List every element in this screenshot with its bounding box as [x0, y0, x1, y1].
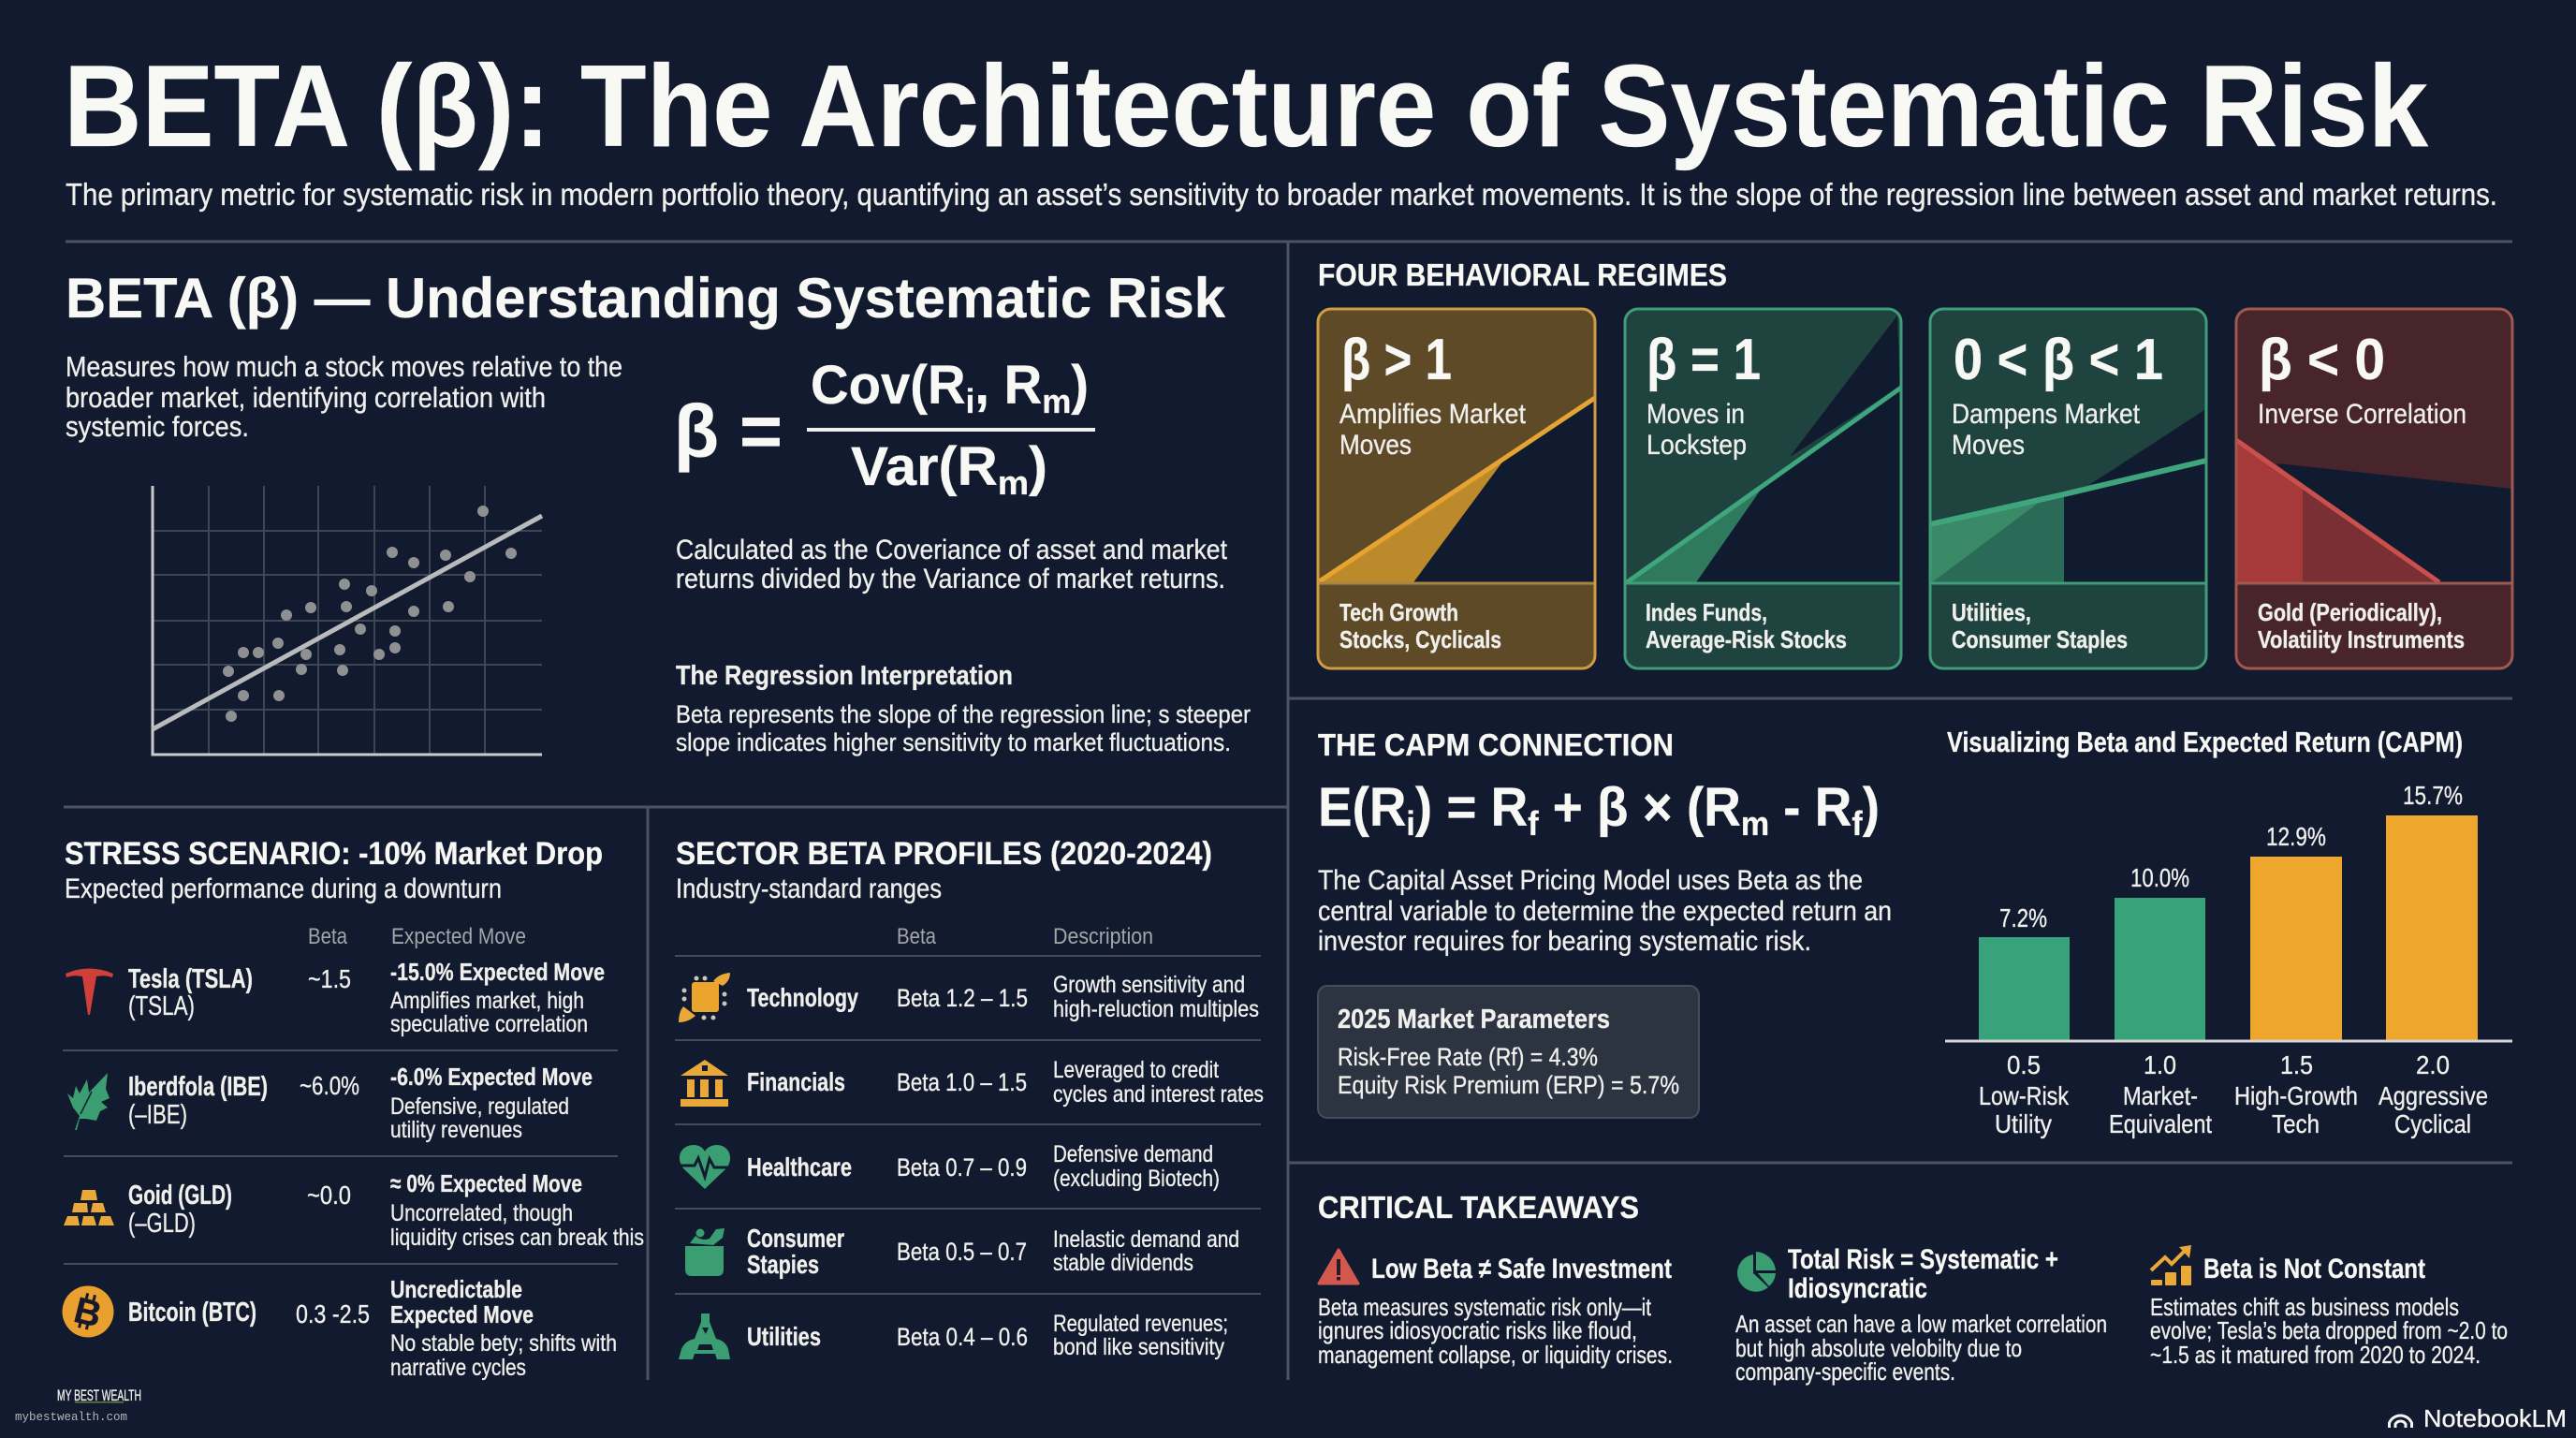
card: beta equals 1: β = 1: [1647, 328, 1761, 392]
card: beta equals 1: Lockstep: [1647, 430, 1747, 461]
formula: CAPM: f: [1528, 804, 1539, 843]
row: Financials: Financials: [747, 1067, 845, 1096]
bar chart: beta and expected return: 1.5: [2280, 1050, 2313, 1079]
takeaway: total risk: Total Risk = Systematic +: [1788, 1244, 2058, 1275]
row: Iberdrola: Iberdfola (IBE): [128, 1072, 268, 1102]
icon: gold bars: [64, 1190, 114, 1225]
title: BETA (β): The Architecture of Systematic Risk: [64, 42, 2429, 171]
row: Utilities: Beta 0.4 – 0.6: [897, 1323, 1028, 1351]
bar chart: beta and expected return: 2.0: [2416, 1050, 2450, 1079]
row: Gold: Uncorrelated, though: [390, 1200, 573, 1226]
heading: THE CAPM CONNECTION: [1318, 727, 1674, 762]
subheading: Industry-standard ranges: [676, 873, 942, 904]
card: beta between 0 and 1: Moves: [1952, 430, 2025, 461]
bar chart: beta and expected return: Market-: [2123, 1081, 2198, 1110]
card: beta less than 0: Gold (Periodically),: [2258, 598, 2442, 626]
bar chart: beta and expected return: High-Growth: [2234, 1081, 2358, 1110]
description: central variable to determine the expected return an: [1318, 896, 1892, 927]
row: Healthcare: (excluding Biotech): [1053, 1166, 1220, 1192]
bar chart: beta and expected return: 0.5: [2007, 1050, 2041, 1079]
icon: warning triangle: [1319, 1250, 1358, 1284]
logo: NotebookLM: NotebookLM: [2423, 1404, 2567, 1432]
row: Gold: ~0.0: [307, 1181, 351, 1210]
formula: beta: =: [739, 389, 783, 473]
card: beta equals 1: Average-Risk Stocks: [1646, 625, 1847, 653]
card: beta between 0 and 1: Utilities,: [1952, 598, 2031, 626]
bar chart: beta and expected return: Aggressive: [2378, 1081, 2488, 1110]
formula: beta: β: [674, 389, 719, 473]
description: Measures how much a stock moves relative to the: [66, 350, 622, 383]
row: Tesla: -15.0% Expected Move: [390, 958, 605, 986]
row: Bitcoin: No stable bety; shifts with: [390, 1330, 617, 1357]
formula: beta: , R: [974, 355, 1042, 416]
row: Gold: liquidity crises can break this: [390, 1225, 644, 1251]
heading: STRESS SCENARIO: -10% Market Drop: [65, 836, 603, 872]
takeaway: total risk: but high absolute velobilty due to: [1735, 1334, 2022, 1362]
row: Iberdrola: utility revenues: [390, 1117, 522, 1143]
card: beta between 0 and 1: Consumer Staples: [1952, 625, 2128, 653]
row: Technology: Beta 1.2 – 1.5: [897, 984, 1028, 1012]
row: Gold: (–GLD): [128, 1209, 196, 1239]
row: Consumer Staples: Stapies: [747, 1250, 819, 1279]
subheading: Expected performance during a downturn: [65, 873, 502, 904]
icon: utility tower: [679, 1313, 730, 1359]
row: Bitcoin: Bitcoin (BTC): [128, 1298, 256, 1328]
row: Healthcare: Defensive demand: [1053, 1141, 1213, 1167]
panel: understanding systematic risk: [66, 267, 1251, 756]
row: Gold: Goid (GLD): [128, 1181, 232, 1211]
formula: beta: m: [998, 463, 1029, 502]
heading: CRITICAL TAKEAWAYS: [1318, 1190, 1639, 1225]
row: Iberdrola: [67, 1063, 593, 1143]
formula explanation: [676, 535, 1228, 594]
description: [1318, 865, 1892, 957]
row: Bitcoin: 0.3 -2.5: [296, 1299, 370, 1328]
takeaway: beta not constant: ~1.5 as it matured from 2020 to 2024.: [2150, 1341, 2481, 1369]
row: Healthcare: Beta 0.7 – 0.9: [897, 1153, 1027, 1181]
bar chart: beta and expected return: Utility: [1995, 1109, 2052, 1138]
bar chart: beta and expected return: 7.2%: [1999, 903, 2047, 932]
logo: My Best Wealth: MY BEST WEALTH: [57, 1387, 141, 1404]
chart: regression scatter plot: [153, 486, 542, 755]
logo: My Best Wealth: [15, 1387, 141, 1424]
card: beta equals 1: [1625, 309, 1901, 668]
formula: beta: ): [1029, 436, 1047, 497]
callout: 2025 market parameters: Risk-Free Rate (Rf) = 4.3%: [1338, 1043, 1598, 1071]
formula: CAPM: i: [1406, 804, 1415, 843]
row: Bitcoin: Expected Move: [390, 1300, 534, 1328]
panel: stress scenario: [62, 836, 644, 1381]
bar chart: beta and expected return: Tech: [2272, 1109, 2320, 1138]
takeaway: low beta: Beta measures systematic risk only—it: [1318, 1293, 1652, 1321]
table header: Expected Move: [391, 924, 526, 949]
table header: Beta: [308, 924, 348, 949]
row: Tesla: [66, 958, 605, 1037]
row: Utilities: Utilities: [747, 1322, 821, 1351]
icon: bank: [681, 1060, 728, 1107]
formula: beta: i: [966, 382, 974, 420]
formula: CAPM: E(R: [1318, 777, 1412, 838]
takeaway: low beta: ignures idiosyocratic risks like floud,: [1318, 1316, 1637, 1344]
formula explanation: Calculated as the Coveriance of asset and market: [676, 535, 1228, 565]
bar chart: beta and expected return: 10.0%: [2130, 863, 2189, 892]
row: Financials: [681, 1057, 1264, 1108]
takeaway: low beta: Low Beta ≠ Safe Investment: [1371, 1254, 1672, 1284]
heading: BETA (β) — Understanding Systematic Risk: [66, 267, 1226, 330]
row: Consumer Staples: Beta 0.5 – 0.7: [897, 1238, 1027, 1266]
takeaway: beta not constant: [2150, 1245, 2508, 1369]
description: The Capital Asset Pricing Model uses Beta as the: [1318, 865, 1863, 896]
bar chart: beta and expected return: Low-Risk: [1979, 1081, 2070, 1110]
icon: bitcoin: B: [70, 1290, 106, 1336]
row: Bitcoin: Uncredictable: [390, 1275, 522, 1303]
regression interpretation: The Regression Interpretation: [676, 661, 1013, 691]
formula: beta: Cov(R: [811, 355, 971, 416]
callout: 2025 market parameters: 2025 Market Parameters: [1338, 1005, 1610, 1034]
card: beta between 0 and 1: Dampens Market: [1952, 399, 2141, 430]
table header: [897, 924, 1153, 949]
row: Consumer Staples: Inelastic demand and: [1053, 1226, 1239, 1253]
row: Technology: Growth sensitivity and: [1053, 972, 1245, 998]
takeaway: total risk: An asset can have a low market correlation: [1735, 1310, 2107, 1338]
row: Tesla: (TSLA): [128, 991, 195, 1021]
panel: sector beta profiles: [675, 836, 1264, 1360]
card: beta greater than 1: Tech Growth: [1339, 598, 1458, 626]
card: beta greater than 1: β > 1: [1341, 328, 1452, 392]
formula: CAPM: + β × (R: [1539, 777, 1741, 838]
panel: critical takeaways: [1318, 1190, 2508, 1386]
row: Healthcare: Healthcare: [747, 1152, 852, 1181]
formula: CAPM: ) = R: [1415, 777, 1528, 838]
regression interpretation: Beta represents the slope of the regression line; s steeper: [676, 700, 1251, 728]
regression interpretation: [676, 661, 1251, 756]
bar chart: beta and expected return: 1.0: [2144, 1050, 2176, 1079]
heading: FOUR BEHAVIORAL REGIMES: [1318, 257, 1727, 292]
card: beta less than 0: Inverse Correlation: [2258, 399, 2466, 430]
row: Tesla: Amplifies market, high: [390, 988, 584, 1014]
card: beta equals 1: Indes Funds,: [1646, 598, 1767, 626]
row: Bitcoin: narrative cycles: [390, 1355, 526, 1381]
row: Iberdrola: Defensive, regulated: [390, 1093, 569, 1120]
chart title: Visualizing Beta and Expected Return (CAPM): [1947, 726, 2463, 758]
row: Consumer Staples: [685, 1224, 1239, 1279]
takeaway: beta not constant: Beta is Not Constant: [2203, 1254, 2425, 1284]
table header: Description: [1053, 924, 1153, 949]
formula: CAPM: f: [1852, 804, 1864, 843]
icon: consumer staples: [685, 1228, 724, 1276]
icon: leaf: [67, 1073, 110, 1130]
icon: Tesla logo: [66, 968, 113, 1015]
icon: heart: [680, 1145, 730, 1189]
formula: beta: m: [1042, 382, 1071, 420]
row: Technology: Technology: [747, 983, 858, 1012]
row: Utilities: [679, 1311, 1228, 1360]
table header: [308, 924, 526, 949]
row: Iberdrola: -6.0% Expected Move: [390, 1063, 593, 1091]
card: beta greater than 1: Amplifies Market: [1339, 399, 1527, 430]
takeaway: low beta: management collapse, or liquidity crises.: [1318, 1341, 1673, 1369]
bar chart: beta and expected return: 15.7%: [2403, 781, 2463, 810]
card: beta greater than 1: Moves: [1339, 430, 1412, 461]
bar chart: beta and expected return: Equivalent: [2109, 1109, 2212, 1138]
description: systemic forces.: [66, 410, 249, 443]
icon: NotebookLM arcs: [2389, 1416, 2411, 1428]
bar chart: beta and expected return: Cyclical: [2394, 1109, 2471, 1138]
card: beta between 0 and 1: 0 < β < 1: [1954, 328, 2163, 392]
row: Iberdrola: (–IBE): [128, 1100, 187, 1130]
row: Gold: ≈ 0% Expected Move: [390, 1169, 582, 1197]
formula: beta: ): [1071, 355, 1089, 416]
row: Financials: cycles and interest rates: [1053, 1081, 1264, 1108]
description: investor requires for bearing systematic risk.: [1318, 926, 1811, 957]
formula: beta: [674, 355, 1095, 502]
card: beta between 0 and 1: [1930, 309, 2206, 668]
card: beta equals 1: Moves in: [1647, 399, 1745, 430]
heading: SECTOR BETA PROFILES (2020-2024): [676, 836, 1212, 872]
row: Gold: [64, 1169, 644, 1251]
icon: bitcoin: [62, 1286, 114, 1337]
row: Technology: [679, 972, 1259, 1022]
formula: beta: Var(R: [851, 436, 993, 497]
row: Utilities: Regulated revenues;: [1053, 1311, 1228, 1337]
takeaway: beta not constant: Estimates chift as business models: [2150, 1293, 2459, 1321]
callout: 2025 market parameters: [1318, 986, 1699, 1118]
card: beta less than 0: [2236, 309, 2512, 668]
formula: CAPM: - R: [1769, 777, 1852, 838]
card: beta less than 0: β < 0: [2259, 328, 2385, 392]
row: Financials: Leveraged to credit: [1053, 1057, 1219, 1083]
bar chart: beta and expected return: 12.9%: [2266, 822, 2326, 851]
formula explanation: returns divided by the Variance of market returns.: [676, 564, 1225, 594]
row: Financials: Beta 1.0 – 1.5: [897, 1068, 1027, 1096]
bar chart: beta and expected return: [1945, 726, 2512, 1138]
icon: rising chart: [2151, 1245, 2191, 1285]
row: Consumer Staples: Consumer: [747, 1224, 844, 1253]
card: beta greater than 1: Stocks, Cyclicals: [1339, 625, 1501, 653]
card: beta greater than 1: [1318, 309, 1595, 668]
icon: pie chart: [1737, 1252, 1776, 1292]
takeaway: total risk: Idiosyncratic: [1788, 1273, 1927, 1304]
regression interpretation: slope indicates higher sensitivity to market fluctuations.: [676, 728, 1231, 756]
takeaway: total risk: [1735, 1244, 2107, 1386]
row: Utilities: bond like sensitivity: [1053, 1334, 1224, 1360]
row: Tesla: Tesla (TSLA): [128, 964, 253, 994]
panel: four behavioral regimes: [1318, 257, 2512, 668]
icon: chip: [679, 973, 730, 1022]
row: Bitcoin: [62, 1275, 617, 1381]
row: Iberdrola: ~6.0%: [300, 1071, 359, 1100]
formula: CAPM: m: [1741, 804, 1769, 843]
table header: Beta: [897, 924, 937, 949]
takeaway: low beta: [1318, 1250, 1673, 1369]
formula: CAPM: ): [1863, 777, 1880, 838]
row: Tesla: ~1.5: [308, 964, 351, 993]
takeaway: total risk: company-specific events.: [1735, 1357, 1955, 1386]
row: Healthcare: [680, 1141, 1220, 1192]
panel: CAPM connection: [1318, 726, 2512, 1138]
logo: My Best Wealth: mybestwealth.com: [15, 1411, 127, 1424]
description: broader market, identifying correlation with: [66, 381, 546, 414]
row: Tesla: speculative correlation: [390, 1011, 588, 1037]
row: Technology: high-reluction multiples: [1053, 996, 1259, 1022]
callout: 2025 market parameters: Equity Risk Premium (ERP) = 5.7%: [1338, 1071, 1679, 1099]
row: Consumer Staples: stable dividends: [1053, 1250, 1193, 1276]
card: beta less than 0: Volatility Instruments: [2258, 625, 2465, 653]
description: [66, 350, 622, 443]
